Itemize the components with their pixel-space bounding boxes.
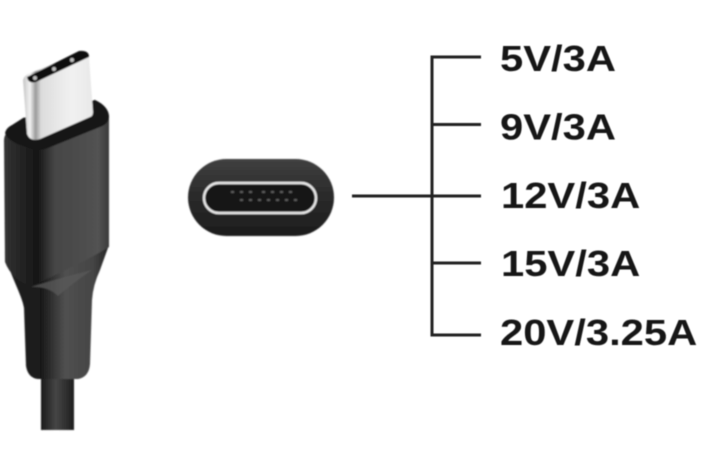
label: 9V/3A: 9V/3A: [500, 108, 616, 148]
label: 20V/3.25A: 20V/3.25A: [500, 314, 697, 353]
lower strain relief: [5, 220, 109, 379]
boot ridge highlight: [31, 270, 92, 296]
port contacts: [231, 191, 297, 201]
label: 15V/3A: 15V/3A: [501, 245, 640, 284]
metal connector shell: [23, 52, 93, 140]
connector opening: [27, 51, 89, 82]
connector contacts: [33, 58, 74, 80]
upper boot body: [4, 100, 109, 286]
port opening with metal ring: [204, 183, 316, 213]
icon: USB-C plug and cable: [4, 51, 109, 430]
label: 5V/3A: 5V/3A: [500, 40, 616, 79]
cable: [41, 374, 74, 430]
port housing: [188, 159, 334, 236]
voltage and current labels: [500, 40, 697, 353]
branching connector lines: [352, 57, 481, 335]
label: 12V/3A: 12V/3A: [501, 177, 640, 216]
icon: USB-C port front view: [188, 159, 334, 236]
boot collar: [5, 100, 109, 150]
